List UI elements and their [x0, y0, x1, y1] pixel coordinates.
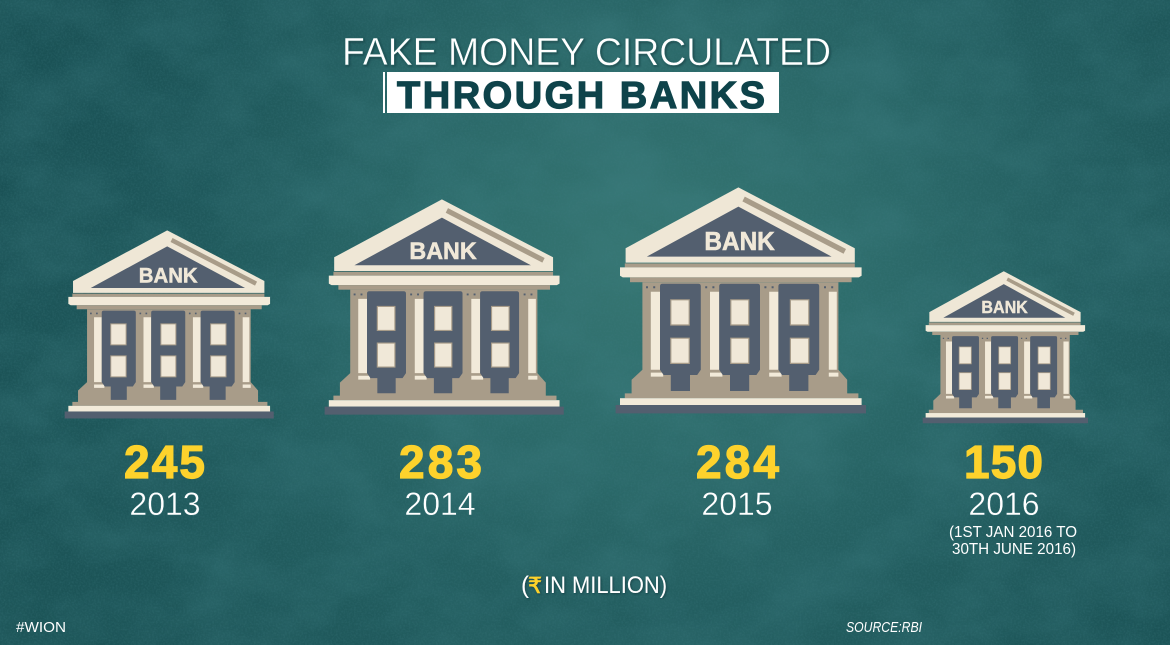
value 2015: 284	[696, 436, 779, 488]
unit label: (	[521, 572, 529, 599]
bank icon 2013	[65, 230, 274, 418]
note 2016 period: 30TH JUNE 2016)	[952, 541, 1076, 558]
value 2016: 150	[964, 436, 1043, 488]
unit label: ₹	[528, 573, 542, 598]
note 2016 period	[949, 524, 1077, 558]
bank label: BANK	[409, 238, 477, 265]
year 2014: 2014	[404, 486, 476, 522]
title	[342, 31, 831, 117]
note 2016 period: (1ST JAN 2016 TO	[949, 524, 1077, 541]
bank icon 2014	[325, 199, 564, 415]
source: SOURCE:RBI	[846, 619, 922, 636]
year 2013: 2013	[129, 486, 201, 522]
value 2013: 245	[124, 436, 205, 488]
bank label: BANK	[139, 263, 198, 287]
title line 2 highlighted: THROUGH BANKS	[397, 75, 765, 117]
hashtag: #WION	[16, 619, 66, 636]
year 2016: 2016	[968, 486, 1040, 522]
year 2015: 2015	[701, 486, 773, 522]
bank icon 2015	[616, 187, 866, 413]
value 2014: 283	[399, 436, 482, 488]
title line 1: FAKE MONEY CIRCULATED	[342, 31, 831, 74]
unit label: IN MILLION)	[544, 572, 667, 599]
bank label: BANK	[981, 298, 1028, 317]
bank label: BANK	[704, 228, 775, 256]
bank icon 2016	[923, 271, 1088, 423]
